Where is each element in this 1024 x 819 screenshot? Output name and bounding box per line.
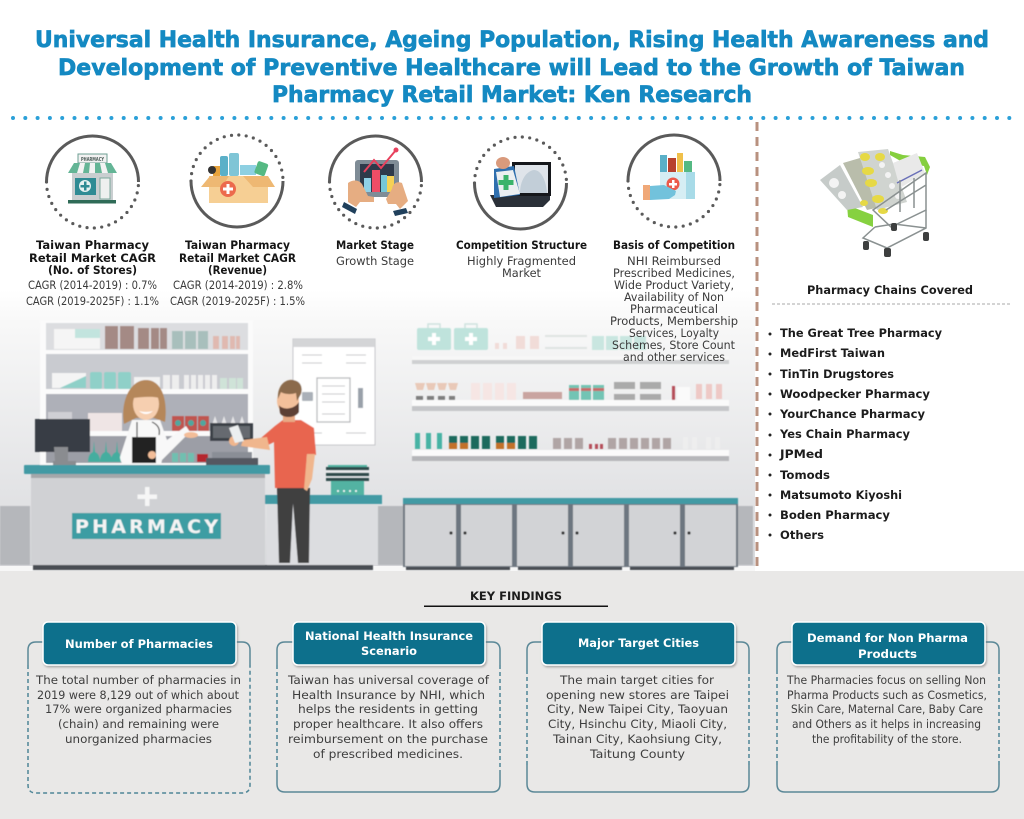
card text: The total number of pharmacies in — [35, 673, 241, 687]
label: revenue CAGR: (Revenue) — [208, 263, 267, 277]
card text: 17% were organized pharmacies — [45, 702, 232, 716]
label: revenue CAGR: Taiwan Pharmacy — [185, 238, 290, 252]
card text: and Others as it helps in increasing — [792, 717, 981, 731]
card text: helps the residents in getting — [298, 702, 478, 716]
label: basis of competition: Products, Membership — [610, 314, 738, 328]
label: market stage — [336, 238, 414, 268]
heading: key findings: KEY FINDINGS — [470, 589, 562, 603]
card: demand for non pharma products — [777, 622, 999, 792]
label: competition structure: Market — [502, 266, 541, 280]
card text: 2019 were 8,129 out of which about — [37, 688, 239, 702]
card text: Taitung County — [589, 747, 685, 761]
label: stores CAGR: Taiwan Pharmacy — [36, 238, 149, 252]
wall base panels — [0, 506, 753, 565]
title: Development of Preventive Healthcare will Lead to the Growth of Taiwan — [58, 56, 965, 81]
list of pharmacy chains: Yes Chain Pharmacy — [779, 427, 910, 441]
card: major target cities — [527, 622, 749, 792]
list of pharmacy chains: Tomods — [780, 468, 830, 482]
icon: laptop with doctor — [474, 137, 566, 229]
card text: reimbursement on the purchase — [288, 732, 488, 746]
counter with pharmacy sign: PHARMACY — [75, 516, 218, 538]
label: basis of competition: Services, Loyalty — [629, 326, 719, 340]
card text: Health Insurance by NHI, which — [292, 688, 485, 702]
card heading: Products — [858, 647, 917, 661]
label: basis of competition: Pharmaceutical — [630, 302, 718, 316]
card: number of pharmacies — [28, 622, 250, 793]
card text: of prescribed medicines. — [313, 747, 463, 761]
card text: unorganized pharmacies — [65, 732, 212, 746]
label: revenue CAGR — [170, 238, 305, 308]
label: basis of competition: Basis of Competition — [613, 238, 735, 252]
list of pharmacy chains: Boden Pharmacy — [780, 508, 890, 522]
card heading: National Health Insurance — [305, 629, 473, 643]
label: market stage: Market Stage — [336, 238, 414, 252]
KPI: market stage — [330, 136, 422, 268]
title: Universal Health Insurance, Ageing Population, Rising Health Awareness and — [35, 28, 989, 53]
card text — [287, 673, 490, 761]
card text: The main target cities for — [559, 673, 714, 687]
label: revenue CAGR: CAGR (2014-2019) : 2.8% — [173, 278, 303, 292]
KPI: revenue CAGR — [170, 135, 305, 308]
KPI: competition structure — [456, 137, 587, 280]
list of pharmacy chains: Others — [780, 528, 824, 542]
computer monitors and register — [35, 419, 253, 465]
list of pharmacy chains: Woodpecker Pharmacy — [780, 387, 931, 401]
icon: pharmacy store: PHARMACY — [81, 157, 105, 163]
label: basis of competition — [610, 238, 738, 364]
list of pharmacy chains: TinTin Drugstores — [780, 367, 894, 381]
card heading — [542, 622, 735, 665]
icon: tablet with chart — [330, 136, 422, 228]
list of pharmacy chains: JPMed — [779, 447, 823, 461]
card heading: Scenario — [361, 644, 417, 658]
right shelves with products — [412, 324, 729, 461]
card text: City, New Taipei City, Taoyuan — [547, 702, 728, 716]
card text: The Pharmacies focus on selling Non — [786, 673, 986, 687]
pharmacist — [120, 380, 198, 465]
card text: the profitability of the store. — [812, 732, 962, 746]
counter with pharmacy sign — [24, 465, 373, 570]
card text: Tainan City, Kaohsiung City, — [552, 732, 722, 746]
card text: Taiwan has universal coverage of — [287, 673, 490, 687]
card text — [35, 673, 241, 746]
heading: pharmacy chains covered: Pharmacy Chains Covered — [807, 283, 973, 297]
side table and basket — [265, 465, 382, 565]
list of pharmacy chains: The Great Tree Pharmacy — [780, 326, 942, 340]
card heading — [43, 622, 236, 665]
card text: opening new stores are Taipei — [546, 688, 729, 702]
card text — [546, 673, 729, 761]
customer — [229, 380, 316, 570]
label: market stage: Growth Stage — [336, 254, 414, 268]
icon: shopping cart with medicine — [820, 149, 930, 257]
card heading: Major Target Cities — [578, 636, 699, 650]
icon: open box of products — [191, 135, 283, 227]
label: stores CAGR: CAGR (2014-2019) : 0.7% — [28, 278, 157, 292]
icon: hand holding medicine bag — [628, 135, 720, 227]
icon: pharmacy store — [46, 136, 138, 228]
card heading — [293, 622, 485, 665]
card text: Skin Care, Maternal Care, Baby Care — [791, 702, 983, 716]
poster — [293, 339, 375, 445]
label: revenue CAGR: Retail Market CAGR — [179, 251, 296, 265]
card text — [786, 673, 987, 746]
list of pharmacy chains: Matsumoto Kiyoshi — [780, 488, 902, 502]
card text: City, Hsinchu City, Miaoli City, — [548, 717, 727, 731]
label: stores CAGR — [26, 238, 159, 308]
card text: (chain) and remaining were — [58, 717, 219, 731]
list of pharmacy chains — [768, 326, 942, 542]
label: stores CAGR: CAGR (2019-2025F) : 1.1% — [26, 294, 159, 308]
list of pharmacy chains: MedFirst Taiwan — [780, 346, 885, 360]
label: basis of competition: Schemes, Store Count — [612, 338, 735, 352]
title — [35, 28, 989, 108]
label: basis of competition: Wide Product Variety, — [614, 278, 734, 292]
label: basis of competition: Prescribed Medicines, — [613, 266, 735, 280]
label: competition structure — [456, 238, 587, 280]
storage cabinets — [403, 498, 738, 570]
card heading — [792, 622, 985, 665]
card text: Pharma Products such as Cosmetics, — [787, 688, 987, 702]
card text: proper healthcare. It also offers — [293, 717, 483, 731]
card: national health insurance — [277, 622, 500, 792]
list of pharmacy chains: YourChance Pharmacy — [779, 407, 925, 421]
label: basis of competition: and other services — [623, 350, 725, 364]
label: stores CAGR: (No. of Stores) — [48, 263, 137, 277]
pharmacy store illustration — [0, 320, 753, 570]
KPI: stores CAGR — [26, 136, 159, 308]
label: basis of competition: Availability of Non — [624, 290, 724, 304]
panel: pharmacy chains — [768, 149, 1010, 542]
card heading: Number of Pharmacies — [65, 637, 213, 651]
left shelving unit — [40, 320, 258, 465]
label: stores CAGR: Retail Market CAGR — [29, 251, 156, 265]
label: revenue CAGR: CAGR (2019-2025F) : 1.5% — [170, 294, 305, 308]
label: competition structure: Highly Fragmented — [467, 254, 576, 268]
card heading: Demand for Non Pharma — [807, 631, 968, 645]
title: Pharmacy Retail Market: Ken Research — [272, 83, 752, 108]
label: basis of competition: NHI Reimbursed — [627, 254, 721, 268]
label: competition structure: Competition Structure — [456, 238, 587, 252]
KPI: basis of competition — [610, 135, 738, 364]
